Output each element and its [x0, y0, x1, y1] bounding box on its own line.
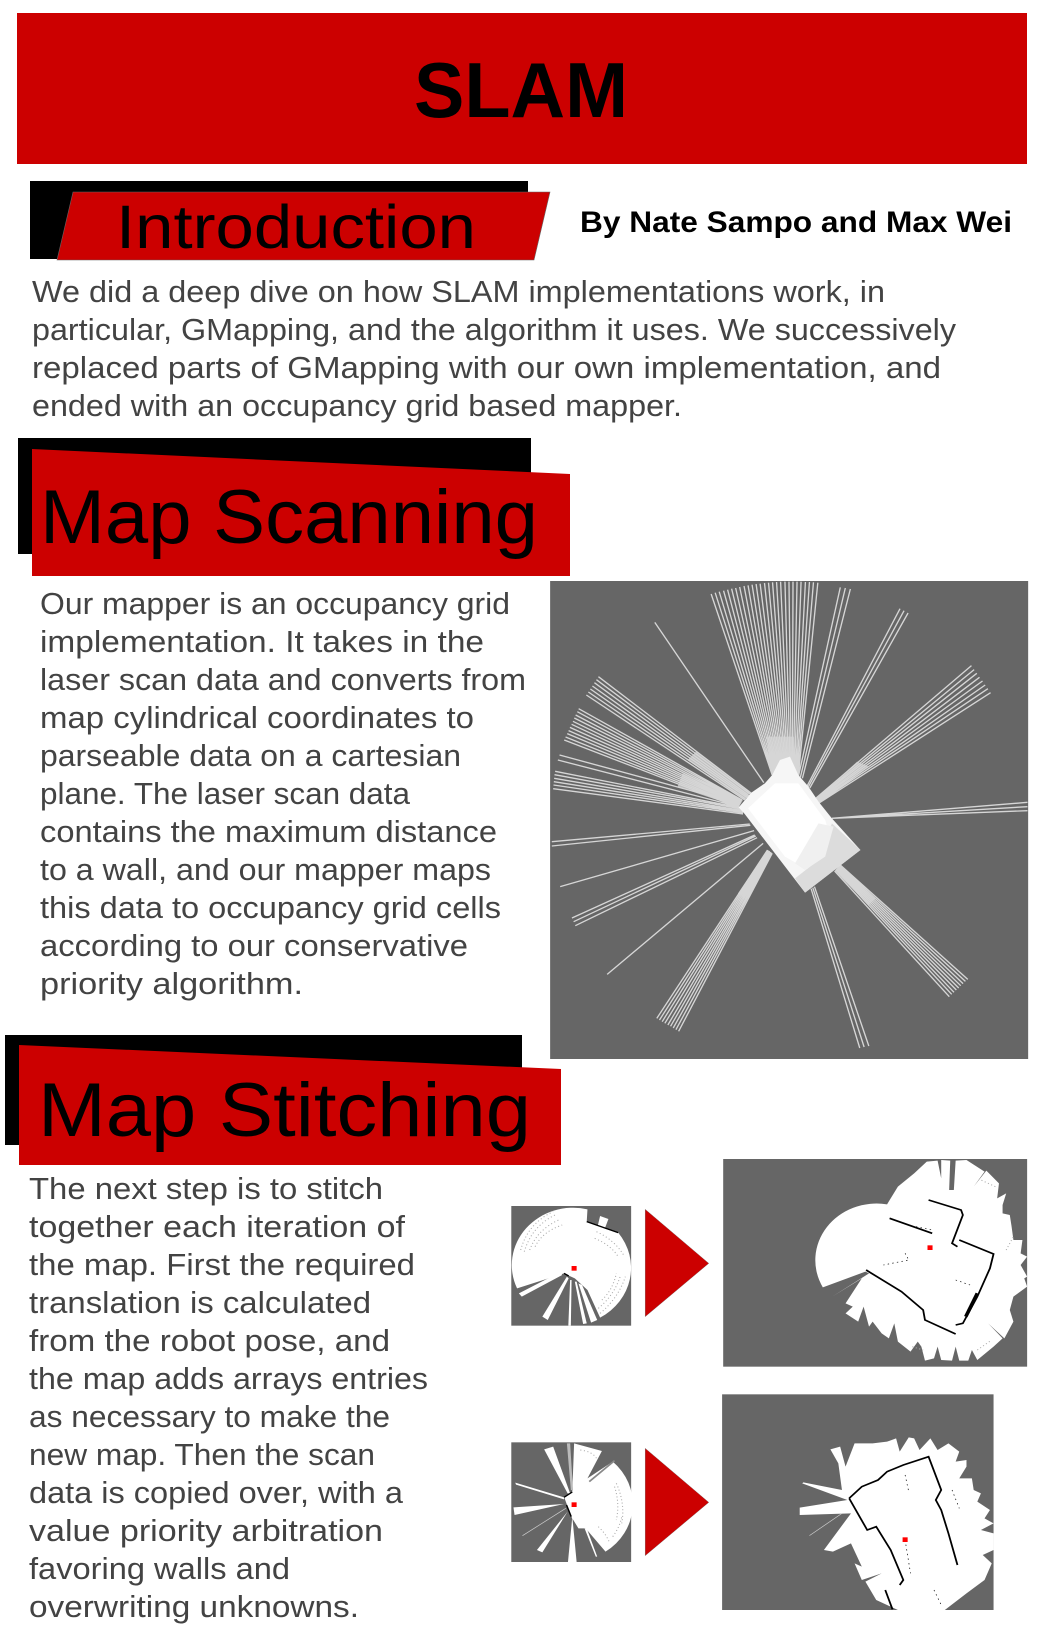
text block: map scanning: plane. The laser scan data — [40, 776, 411, 811]
figure: map stitching images and arrows — [511, 1159, 1028, 1610]
heading: Map Stitching — [5, 1035, 561, 1165]
map: first stitched result — [723, 1159, 1027, 1367]
text block: map scanning: priority algorithm. — [40, 966, 303, 1001]
text block: map scanning: contains the maximum distance — [40, 814, 497, 849]
text block: map stitching: overwriting unknowns. — [29, 1589, 359, 1624]
text block: map stitching: new map. Then the scan — [29, 1437, 375, 1472]
text block: map stitching — [29, 1171, 428, 1624]
text block: map scanning: implementation. It takes in the — [40, 624, 484, 659]
title banner — [17, 13, 1027, 164]
text block: map stitching: the map adds arrays entries — [29, 1361, 428, 1396]
heading: Map Stitching: Map Stitching — [38, 1068, 531, 1153]
text block: introduction: We did a deep dive on how SLAM implementations work, in — [32, 274, 885, 309]
text block: map stitching: the map. First the required — [29, 1247, 415, 1282]
text block: map stitching: The next step is to stitch — [29, 1171, 383, 1206]
text block: map stitching: from the robot pose, and — [29, 1323, 390, 1358]
text block: map stitching: data is copied over, with a — [29, 1475, 404, 1510]
text block: map scanning: map cylindrical coordinates to — [40, 700, 474, 735]
heading: Map Scanning — [18, 438, 570, 576]
heading: Map Scanning: Map Scanning — [40, 475, 538, 560]
text block: introduction: replaced parts of GMapping with our own implementation, and — [32, 350, 941, 385]
text block: map stitching: translation is calculated — [29, 1285, 371, 1320]
text block: map scanning: to a wall, and our mapper maps — [40, 852, 491, 887]
text block: map scanning: this data to occupancy grid cells — [40, 890, 501, 925]
arrow — [645, 1448, 709, 1556]
heading: Introduction — [30, 181, 550, 261]
heading: Introduction: Introduction — [116, 193, 476, 261]
text block: map stitching: value priority arbitration — [29, 1513, 383, 1548]
text block: introduction — [32, 274, 957, 423]
map: second stitched result — [722, 1394, 994, 1610]
map: second scan — [511, 1442, 633, 1562]
map: first scan — [511, 1206, 631, 1326]
text block: map stitching: together each iteration of — [29, 1209, 405, 1244]
text block: map scanning: according to our conservative — [40, 928, 468, 963]
text block: introduction: ended with an occupancy grid based mapper. — [32, 388, 682, 423]
authors byline: By Nate Sampo and Max Wei — [580, 206, 1012, 239]
arrow — [645, 1209, 709, 1317]
text block: map stitching: favoring walls and — [29, 1551, 290, 1586]
text block: map scanning: parseable data on a cartesian — [40, 738, 461, 773]
text block: map scanning: laser scan data and converts from — [40, 662, 526, 697]
text block: map scanning — [40, 586, 526, 1001]
text block: map scanning: Our mapper is an occupancy grid — [40, 586, 510, 621]
text block: map stitching: as necessary to make the — [29, 1399, 390, 1434]
text block: introduction: particular, GMapping, and the algorithm it uses. We successively — [32, 312, 957, 347]
chart: laser scan occupancy image — [550, 581, 1028, 1059]
title banner: SLAM — [414, 46, 628, 134]
